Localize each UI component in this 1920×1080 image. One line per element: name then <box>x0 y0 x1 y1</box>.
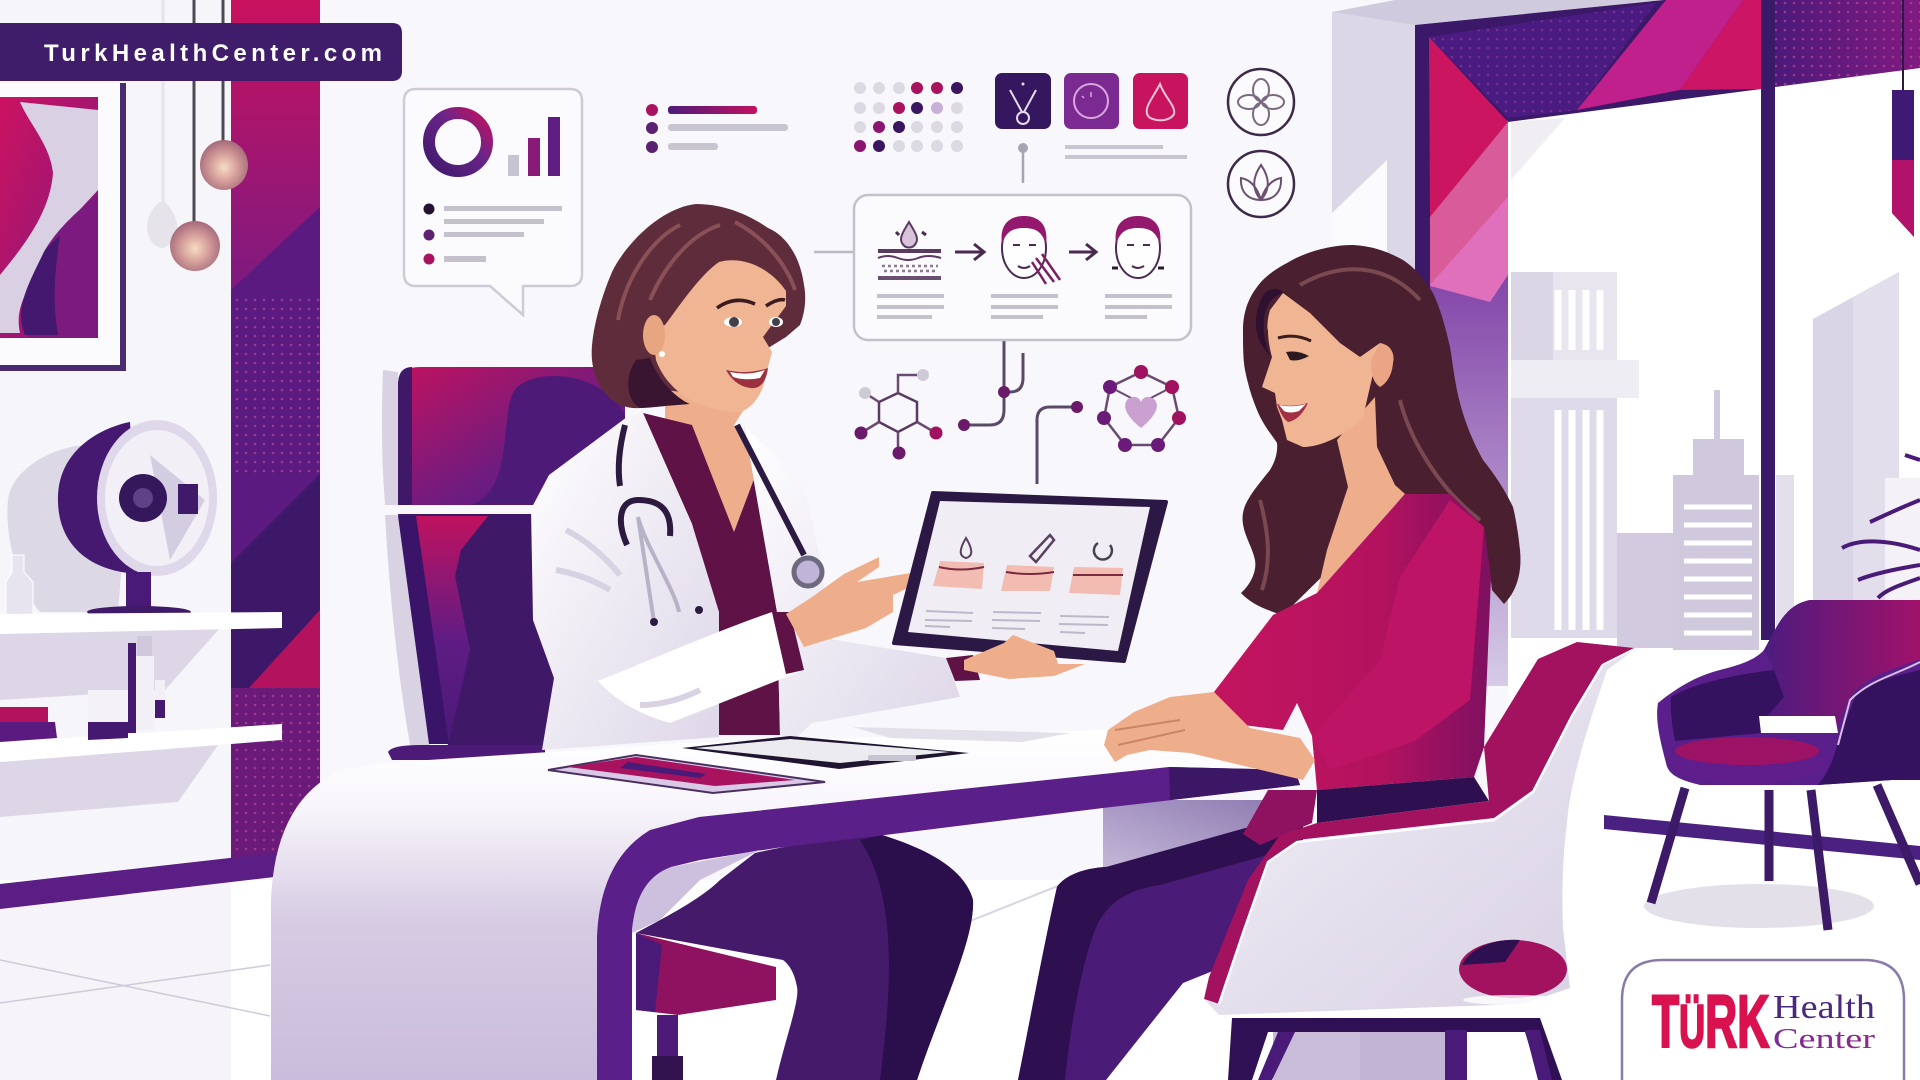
doctor eyes and brows <box>717 300 785 327</box>
patient face <box>1262 293 1380 447</box>
hanging light <box>1892 0 1914 237</box>
floor band by armchair <box>1604 815 1920 860</box>
doctor hair shadow and strands <box>618 222 795 408</box>
armchair <box>1651 600 1920 930</box>
doctor coat <box>531 413 960 750</box>
icon: drop tile <box>1133 73 1188 129</box>
patient hair highlights <box>1260 269 1480 590</box>
window frame <box>1332 0 1761 686</box>
wall column with geometric panels <box>231 0 320 860</box>
clipboard <box>682 736 969 769</box>
doctor legs <box>636 835 973 1080</box>
patient smile <box>1277 403 1308 422</box>
plant <box>1842 455 1920 598</box>
process panel <box>854 195 1191 340</box>
doctor figure <box>531 204 960 750</box>
patient neck and chest <box>1317 397 1405 593</box>
logo card <box>1622 960 1904 1080</box>
consultation desk <box>271 727 1310 1080</box>
stethoscope <box>619 425 822 626</box>
patient blouse <box>1214 494 1491 790</box>
wall shelves <box>0 612 282 817</box>
heart network icon <box>1097 365 1186 452</box>
patient eye and brow <box>1278 336 1311 360</box>
icon: clover circle <box>1228 69 1294 135</box>
city skyline <box>1511 272 1920 650</box>
icon: stethoscope tile <box>995 73 1051 129</box>
floor skirting band <box>0 850 300 909</box>
website pill <box>0 23 402 81</box>
tablet <box>894 493 1166 661</box>
tablet screen <box>908 501 1150 651</box>
bottle on shelf <box>6 555 33 619</box>
icon: gauge tile <box>1064 73 1119 129</box>
icon: face with hand <box>1002 216 1060 284</box>
doctor hair back <box>592 204 805 408</box>
patient desk pedestal <box>1103 800 1300 870</box>
icon: skin layers with drop <box>878 222 941 278</box>
patient ear <box>1371 343 1394 387</box>
logo word Center: Center <box>1773 1023 1875 1055</box>
doctor face <box>652 260 786 412</box>
patient hair back <box>1241 245 1520 615</box>
desk purple edge <box>597 767 1300 1080</box>
doctor chair <box>382 367 625 760</box>
patient chair <box>1204 642 1634 1015</box>
molecule icon <box>854 369 942 460</box>
arrow <box>955 244 984 260</box>
doctor neck and chest <box>665 390 757 532</box>
patient forelock <box>1256 289 1283 357</box>
bubble list <box>424 204 562 264</box>
website pill: TurkHealthCenter.com <box>44 40 382 67</box>
donut chart <box>429 113 487 171</box>
logo wordmark TURK: TÜRK <box>1652 980 1769 1063</box>
patient chair legs <box>1228 1018 1562 1080</box>
mini bar chart <box>508 117 560 176</box>
under-desk shadow <box>632 850 760 933</box>
top bullet list <box>646 104 788 153</box>
dot matrix <box>854 82 963 152</box>
icon: lotus circle <box>1228 151 1294 217</box>
skin analysis device <box>7 420 217 618</box>
pointing hand <box>786 557 929 647</box>
doctor shirt <box>643 413 780 735</box>
doctor chair seat <box>636 933 776 1080</box>
armchair shadow <box>1644 884 1874 928</box>
step captions <box>877 294 1172 319</box>
pendant lamps <box>147 0 248 271</box>
doctor ear and earring <box>643 315 665 357</box>
icon tiles <box>995 73 1188 129</box>
framed wall art <box>0 83 126 371</box>
doctor cuff <box>772 612 804 674</box>
patient sleeve <box>1312 500 1484 770</box>
desk shadow <box>853 727 1071 742</box>
patient chair armrest <box>1459 940 1567 1005</box>
arrow <box>1069 244 1096 260</box>
tablet skin diagrams <box>925 535 1123 633</box>
logo word Health: Health <box>1773 989 1875 1026</box>
patient waistband <box>1317 777 1489 823</box>
patient legs and lap <box>1018 790 1317 1080</box>
doctor smile <box>726 368 768 388</box>
folder and pen <box>548 755 825 793</box>
patient figure <box>1104 245 1520 823</box>
hero connector lines <box>814 143 1083 484</box>
tile caption lines <box>1065 145 1187 159</box>
patient forearms and hands <box>1104 692 1315 780</box>
icon: clear face <box>1112 216 1164 278</box>
speech bubble with donut and bars <box>404 89 582 315</box>
hand under tablet <box>946 635 1085 681</box>
window mullion and header <box>1761 0 1920 640</box>
